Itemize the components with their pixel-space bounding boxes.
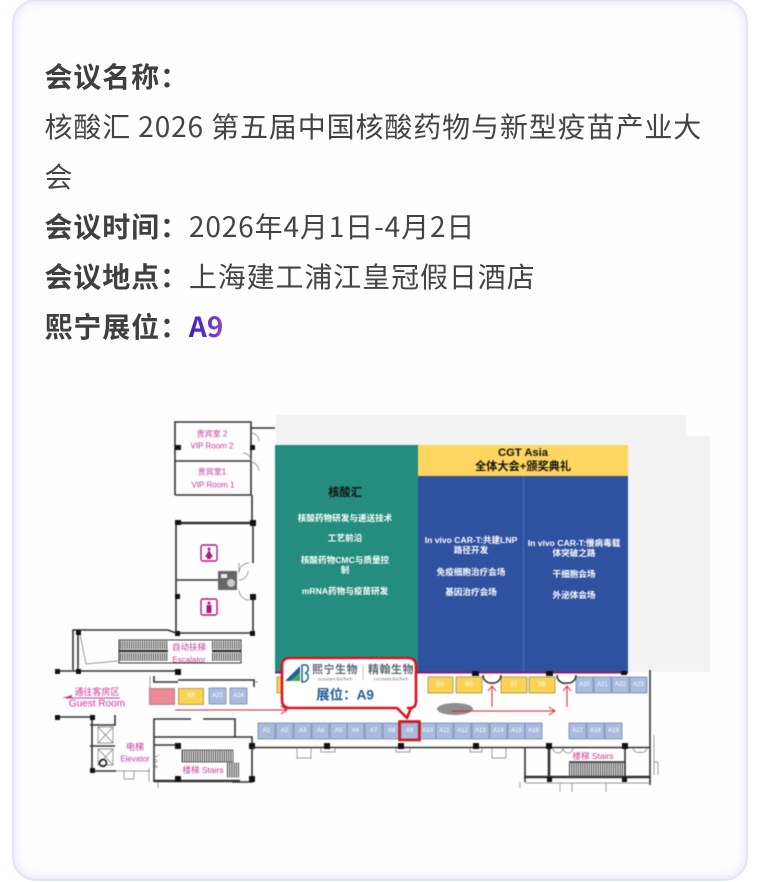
text: conference name continued: 会	[44, 156, 73, 196]
left stairs	[154, 719, 255, 782]
route arrows	[175, 686, 571, 715]
lower booths	[258, 723, 622, 739]
callout: booth A9	[282, 658, 416, 718]
callout: booth A9: Accurant BioTech	[317, 676, 353, 682]
lower booths: A2	[281, 728, 289, 734]
icon: women's restroom	[201, 545, 217, 561]
right stairs	[520, 670, 658, 792]
upper booths: A24	[233, 693, 244, 699]
lower booths: A6	[352, 728, 360, 734]
restrooms	[175, 495, 256, 636]
upper booths: A21	[597, 682, 608, 688]
escalator	[55, 630, 258, 688]
lower booths: A17	[572, 728, 583, 734]
lower booths: A3	[299, 728, 307, 734]
left stairs: 楼梯 Stairs	[182, 765, 224, 775]
text: conference name: 核酸汇 2026 第五届中国核酸药物与新型疫苗产业大	[44, 106, 702, 146]
lower booths: A8	[388, 728, 396, 734]
text: conference date: 会议时间：2026年4月1日-4月2日	[44, 206, 475, 246]
hall front wall	[275, 672, 628, 674]
guest room direction	[62, 686, 125, 710]
upper booths: B9	[187, 693, 195, 699]
callout: booth A9: Accurant BioTech	[373, 676, 409, 682]
hall: CGT left: In vivo CAR-T:共建LNP	[425, 534, 518, 545]
guest room direction: 通往客房区	[74, 686, 120, 697]
south wall and columns	[252, 743, 650, 758]
hall: CGT left	[418, 476, 523, 673]
lower booths: A1	[263, 728, 271, 734]
text: conference name label: 会议名称：	[44, 56, 189, 96]
escalator: 自动扶梯	[172, 642, 206, 652]
hall: CGT right	[523, 476, 628, 673]
lower booths: A19	[608, 728, 619, 734]
icon: company logo	[285, 665, 308, 682]
elevator	[55, 715, 159, 788]
icon: men's restroom	[201, 599, 217, 615]
lower booths: A11	[439, 728, 450, 734]
hall: nucleic acid: 工艺前沿	[328, 532, 363, 543]
A9 highlight	[400, 722, 420, 740]
hall: CGT right: 干细胞会场	[553, 568, 596, 579]
VIP rooms: 贵宾室 2	[197, 428, 228, 438]
callout: booth A9: 精翰生物	[368, 662, 414, 676]
lower booths: A10	[422, 728, 433, 734]
upper booths: B6	[465, 682, 473, 688]
hall: nucleic acid: 核酸药物研发与递送技术	[298, 512, 393, 523]
lower booths: A5	[335, 728, 343, 734]
escalator: Escalator	[172, 656, 206, 664]
upper booths: B8	[538, 682, 546, 688]
lower booths: A12	[457, 728, 468, 734]
text: conference venue: 会议地点：上海建工浦江皇冠假日酒店	[44, 256, 535, 296]
hall: CGT left: 免疫细胞治疗会场	[437, 566, 506, 577]
VIP rooms: 贵宾室1	[198, 466, 227, 476]
upper booths: B5	[436, 682, 444, 688]
callout: booth A9: 展位：A9	[316, 686, 374, 702]
upper booths: A22	[615, 682, 626, 688]
right stairs: 楼梯 Stairs	[572, 751, 614, 761]
hall header: CGT Asia	[418, 445, 628, 476]
lower booths: A13	[475, 728, 486, 734]
center ellipse	[437, 703, 473, 715]
VIP rooms	[175, 422, 275, 495]
upper booths: A25	[212, 693, 223, 699]
text: booth number: 熙宁展位：A9	[44, 306, 223, 346]
hall: CGT right: 外泌体会场	[553, 589, 596, 600]
elevator: Elevator	[120, 754, 150, 764]
hall: nucleic acid: mRNA药物与疫苗研发	[302, 585, 389, 596]
upper booths: A20	[579, 682, 590, 688]
doors and columns along hall front	[472, 671, 627, 683]
upper booths	[150, 677, 647, 704]
hall: CGT right: In vivo CAR-T:慢病毒载	[528, 537, 621, 548]
grey backdrop areas	[276, 415, 710, 672]
callout: booth A9: 熙宁生物	[312, 662, 358, 676]
hall: CGT right: 体突破之路	[553, 547, 596, 558]
lower booths: A7	[370, 728, 378, 734]
hall: CGT left: 基因治疗会场	[445, 586, 497, 597]
lower booths: A18	[590, 728, 601, 734]
hall header: CGT Asia: 全体大会+颁奖典礼	[475, 459, 571, 473]
lower booths: A14	[493, 728, 504, 734]
VIP rooms: VIP Room 2	[191, 442, 234, 450]
hall: nucleic acid: 制	[341, 564, 350, 575]
hall header: CGT Asia: CGT Asia	[498, 447, 549, 459]
hall: CGT left: 路径开发	[454, 544, 489, 555]
hall: nucleic acid	[275, 445, 418, 673]
hall: nucleic acid: 核酸药物CMC与质量控	[301, 554, 390, 565]
upper booths: B7	[510, 682, 518, 688]
upper booths: A23	[633, 682, 644, 688]
VIP rooms: VIP Room 1	[192, 480, 235, 490]
lower booths: A16	[528, 728, 539, 734]
guest room direction: Guest Room	[69, 698, 125, 710]
lower booths: A15	[511, 728, 522, 734]
lower booths: A4	[317, 728, 325, 734]
hall: nucleic acid: 核酸汇	[328, 485, 362, 499]
lower booths: A9	[406, 728, 414, 734]
elevator: 电梯	[126, 741, 144, 752]
